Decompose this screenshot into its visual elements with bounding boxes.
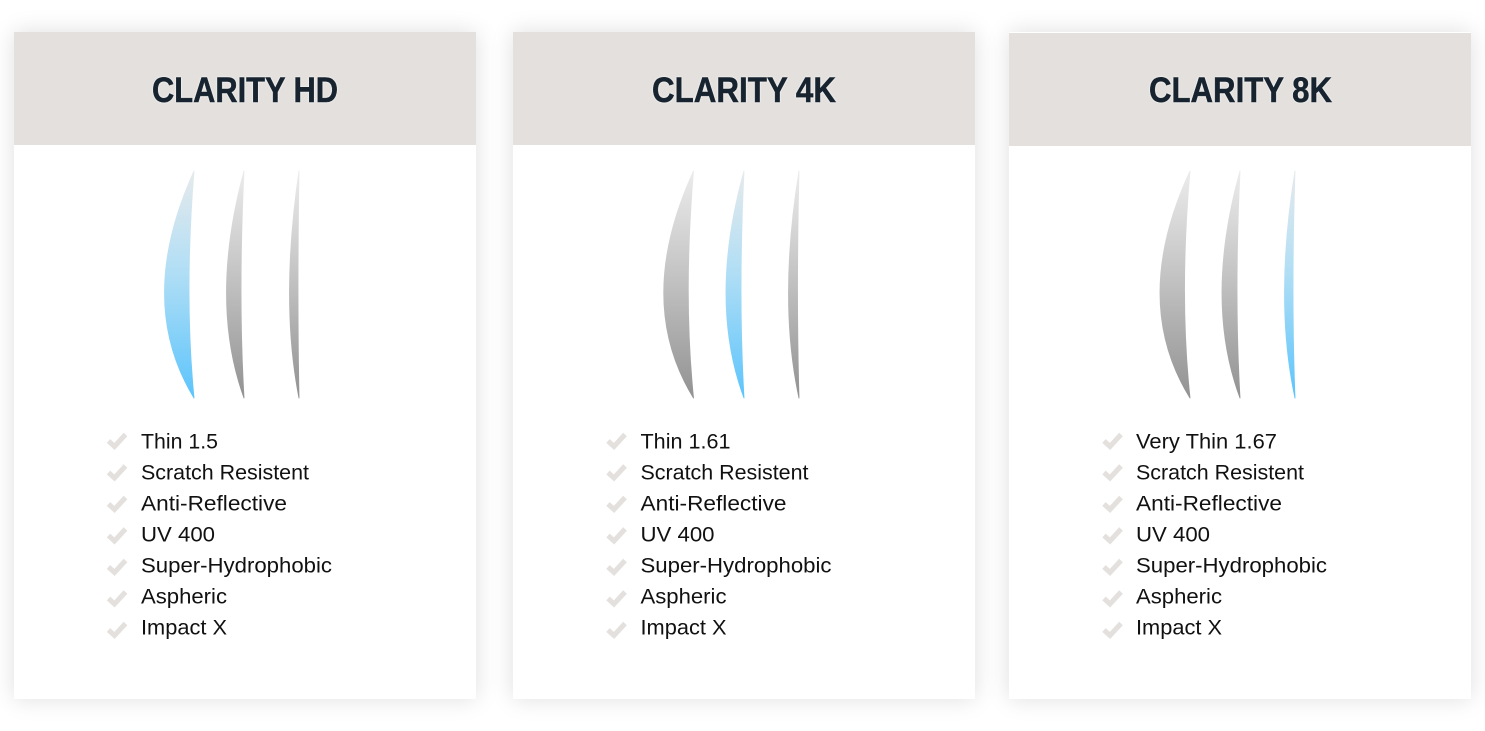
item: UV 400: UV 400 xyxy=(1136,524,1210,546)
header band xyxy=(1009,33,1471,146)
item: UV 400 xyxy=(608,524,714,546)
feature list xyxy=(108,430,332,640)
lens: 1.67 xyxy=(788,171,799,398)
feature list xyxy=(608,430,832,640)
panel: Clarity 8K xyxy=(1009,32,1471,699)
lens: 1.5 xyxy=(1160,171,1190,398)
header band xyxy=(513,32,975,145)
item: Anti-Reflective: Anti-Reflective xyxy=(640,492,786,516)
lens diagram xyxy=(1160,171,1295,398)
item: Impact X: Impact X xyxy=(141,616,227,640)
lens diagram xyxy=(664,171,799,398)
item: Aspheric: Aspheric xyxy=(640,586,726,608)
item: Scratch Resistent: Scratch Resistent xyxy=(640,462,809,484)
item: Impact X: Impact X xyxy=(1136,616,1222,640)
heading: Clarity HD: CLARITY HD xyxy=(152,71,338,110)
item: Anti-Reflective: Anti-Reflective xyxy=(1136,492,1282,516)
item: UV 400: UV 400 xyxy=(141,524,215,546)
item: Aspheric xyxy=(108,586,227,608)
item: UV 400: UV 400 xyxy=(640,524,714,546)
feature list xyxy=(1104,430,1327,640)
item: Super-Hydrophobic: Super-Hydrophobic xyxy=(640,554,832,578)
lens: 1.61 xyxy=(1222,171,1240,398)
item: UV 400 xyxy=(108,524,215,546)
item: Aspheric: Aspheric xyxy=(141,586,227,608)
item: Very Thin 1.67: Very Thin 1.67 xyxy=(1136,430,1277,454)
lens: 1.67 highlighted xyxy=(1284,171,1295,398)
header band xyxy=(14,32,476,145)
item: Scratch Resistent: Scratch Resistent xyxy=(141,462,309,484)
item: Impact X: Impact X xyxy=(640,616,726,640)
item: Thin 1.61: Thin 1.61 xyxy=(640,430,730,454)
lens: 1.61 xyxy=(226,171,244,398)
lens: 1.5 highlighted xyxy=(164,171,194,398)
lens diagram xyxy=(164,171,299,398)
panel: Clarity HD xyxy=(14,32,476,699)
item: Super-Hydrophobic: Super-Hydrophobic xyxy=(141,554,332,578)
item: Aspheric xyxy=(1104,586,1222,608)
lens: 1.5 xyxy=(664,171,694,398)
lens: 1.67 xyxy=(290,171,299,398)
heading: Clarity 4K: CLARITY 4K xyxy=(652,71,836,110)
panel: Clarity 4K xyxy=(513,32,975,699)
lens: 1.61 highlighted xyxy=(726,171,744,398)
item: Thin 1.5: Thin 1.5 xyxy=(141,430,218,454)
item: Anti-Reflective: Anti-Reflective xyxy=(141,492,287,516)
item: UV 400 xyxy=(1104,524,1210,546)
item: Aspheric: Aspheric xyxy=(1136,586,1222,608)
heading: Clarity 8K: CLARITY 8K xyxy=(1149,71,1332,110)
item: Super-Hydrophobic: Super-Hydrophobic xyxy=(1136,554,1327,578)
item: Thin 1.5 xyxy=(108,430,218,454)
item: Impact X xyxy=(108,616,227,640)
item: Aspheric xyxy=(608,586,726,608)
item: Scratch Resistent: Scratch Resistent xyxy=(1136,462,1304,484)
item: Impact X xyxy=(608,616,726,640)
